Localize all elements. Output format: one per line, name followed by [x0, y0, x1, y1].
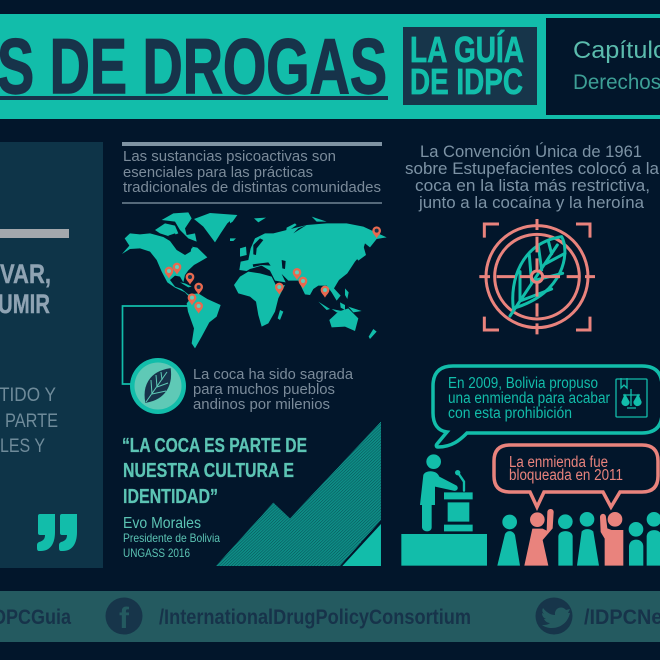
- text block: 1961 convention: [405, 142, 660, 212]
- americas: [122, 212, 237, 348]
- speech bubble: 2009 proposal: con esta prohibición: [448, 405, 572, 422]
- crowd of people: [524, 509, 660, 566]
- quote: Evo Morales: Evo Morales: [123, 515, 201, 532]
- footer band: [0, 591, 660, 642]
- coral figures: [524, 509, 623, 566]
- icon: closing quotation marks: [37, 514, 77, 551]
- icon: facebook: f: [119, 602, 130, 635]
- icon: target over coca leaf: [479, 219, 595, 334]
- text block: psychoactive substances: Las sustancias psicoactivas son: [123, 148, 336, 165]
- connector line: [122, 306, 188, 384]
- speaker at podium: [401, 454, 520, 566]
- map pins: old world: [275, 226, 381, 298]
- icon: facebook: [106, 598, 142, 635]
- speech bubble: 2011 blocked: La enmienda fue: [509, 454, 608, 471]
- text block: psychoactive substances: tradicionales de distintas comunidades: [123, 179, 381, 196]
- text block: sacred coca: para muchos pueblos: [193, 381, 335, 398]
- quote: Evo Morales: [122, 434, 307, 560]
- speech bubble: 2011 blocked: [494, 445, 658, 507]
- panel heading: VAR,: [0, 259, 51, 289]
- quote: Evo Morales: NUESTRA CULTURA E: [123, 459, 294, 482]
- panel body text: TIDO Y: [0, 385, 56, 406]
- panel: left quote: [0, 142, 103, 568]
- icon: law book with scales: [616, 378, 647, 417]
- world map: [122, 212, 387, 348]
- quote: Evo Morales: IDENTIDAD”: [123, 485, 218, 508]
- chapter box: [546, 18, 660, 115]
- panel body text: [0, 385, 58, 457]
- speech bubble: 2009 proposal: En 2009, Bolivia propuso: [448, 375, 598, 392]
- chapter box: Capítulo: [573, 37, 660, 64]
- text block: sacred coca: [193, 366, 354, 413]
- panel heading: UMIR: [0, 289, 50, 319]
- text block: 1961 convention: sobre Estupefacientes colocó a la: [405, 160, 660, 178]
- text block: 1961 convention: La Convención Única de 1961: [420, 142, 642, 161]
- quote: Evo Morales: UNGASS 2016: [123, 546, 190, 560]
- header band: [0, 14, 660, 119]
- badge: La guía de IDPC: LA GUÍA: [410, 29, 524, 70]
- text block: 1961 convention: coca en la lista más restrictiva,: [415, 177, 650, 195]
- map pins: americas: [165, 263, 203, 314]
- text block: psychoactive substances: esenciales para las prácticas: [123, 164, 313, 181]
- text block: sacred coca: andinos por milenios: [193, 396, 330, 413]
- text block: 1961 convention: junto a la cocaína y la heroína: [418, 194, 645, 212]
- quote: Evo Morales: Presidente de Bolivia: [123, 531, 220, 545]
- speech bubble: 2011 blocked: bloqueada en 2011: [509, 467, 623, 484]
- quote: Evo Morales: “LA COCA ES PARTE DE: [122, 434, 307, 457]
- text block: psychoactive substances: [122, 142, 382, 204]
- icon: coca leaf in circle: [130, 358, 186, 414]
- leaf: [510, 237, 565, 316]
- striped mountain graphic: [216, 422, 381, 566]
- old world: [230, 215, 387, 339]
- badge: La guía de IDPC: DE IDPC: [410, 61, 523, 102]
- title: S de drogas: S DE DROGAS: [0, 22, 387, 110]
- badge: La guía de IDPC: [403, 27, 537, 105]
- panel heading: [0, 259, 51, 319]
- speech bubble: 2009 proposal: una enmienda para acabar: [448, 390, 610, 407]
- handle: facebook: /InternationalDrugPolicyConsortium: [159, 606, 471, 629]
- panel body text: PARTE: [5, 411, 58, 432]
- speech bubble: 2009 proposal: [433, 366, 660, 447]
- icon: twitter: [536, 598, 572, 634]
- target rings: [484, 224, 590, 330]
- teal figures: [558, 512, 660, 566]
- panel body text: LES Y: [0, 436, 45, 457]
- text block: sacred coca: La coca ha sido sagrada: [193, 366, 354, 383]
- crosshair: [479, 219, 595, 334]
